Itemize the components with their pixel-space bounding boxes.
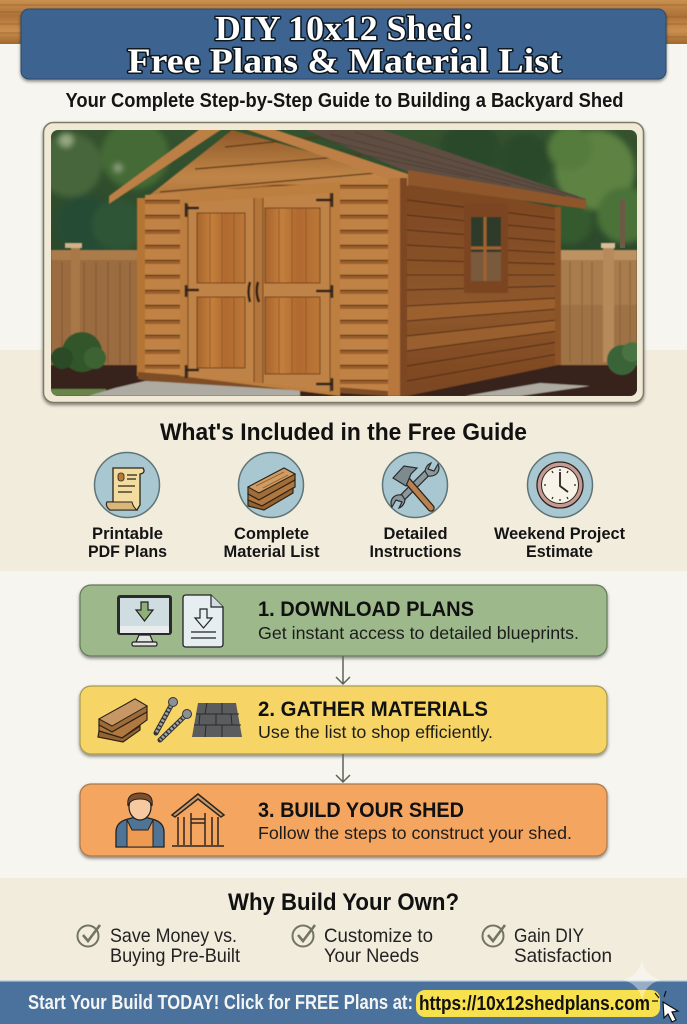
heading: what's included: What's Included in the Free Guide: [160, 419, 527, 446]
feature: weekend project estimate: Estimate: [526, 542, 593, 561]
label: Complete: [234, 524, 309, 543]
wood strip header background: [0, 0, 687, 44]
feature: complete material list: [224, 452, 320, 561]
side wall: [407, 177, 561, 396]
feature: printable pdf plans: PDF Plans: [88, 542, 167, 561]
step description: Use the list to shop efficiently.: [258, 722, 493, 742]
shed illustration: [38, 120, 653, 396]
icon: clock: [528, 452, 592, 518]
tree trunk: [620, 200, 625, 248]
icon: roof shingles: [192, 703, 242, 737]
cta text: Start Your Build TODAY! Click for FREE Plans at:: [28, 992, 413, 1014]
benefit: save money: Buying Pre-Built: [110, 945, 241, 967]
roof and fascia boards: [109, 129, 586, 396]
label: Printable: [92, 524, 163, 543]
step description: Follow the steps to construct your shed.: [258, 823, 572, 843]
ground: [51, 365, 637, 396]
icon: hammer and wrench: [382, 452, 448, 518]
benefit text: Customize to: [324, 925, 433, 947]
heading: why build your own: Why Build Your Own?: [228, 889, 459, 916]
benefit: diy satisfaction: [482, 925, 612, 967]
step 2: gather materials: [80, 686, 607, 754]
arrow: step 2 to 3: [336, 754, 350, 782]
icon: check: [292, 925, 315, 946]
step 3: build your shed: [80, 784, 607, 856]
step description: Get instant access to detailed blueprints.: [258, 623, 579, 643]
icon: worker: [116, 793, 164, 847]
step title: 3. BUILD YOUR SHED: [258, 798, 464, 822]
feature: printable pdf plans: [88, 452, 167, 561]
icon: cursor: [652, 991, 678, 1022]
benefit: save money: [78, 925, 241, 967]
icon: screws: [156, 698, 192, 740]
step 1: download plans: [80, 585, 607, 656]
benefit: customize: Your Needs: [324, 945, 419, 967]
step title: 2. GATHER MATERIALS: [258, 697, 488, 721]
benefit text: Gain DIY: [514, 925, 584, 947]
icon: lumber: [238, 452, 304, 518]
title text: DIY 10x12 Shed:: [215, 10, 474, 48]
icon: scroll: [94, 452, 160, 518]
front wall: [137, 130, 390, 396]
doors: [180, 182, 340, 396]
footer call to action: [0, 960, 687, 1024]
feature: weekend project estimate: [494, 452, 625, 561]
feature: detailed instructions: [370, 452, 462, 561]
feature: complete material list: Material List: [224, 542, 320, 561]
bushes: [51, 332, 642, 375]
step title: 1. DOWNLOAD PLANS: [258, 597, 474, 621]
fences: [51, 243, 637, 366]
trees: [51, 130, 637, 250]
icon: check: [78, 925, 100, 946]
benefit: diy satisfaction: Satisfaction: [514, 945, 612, 967]
feature: detailed instructions: Instructions: [370, 542, 462, 561]
icon: monitor: [117, 595, 172, 646]
window: [464, 203, 508, 293]
icon: shed frame: [172, 794, 224, 846]
label: Weekend Project: [494, 524, 625, 543]
benefit text: Save Money vs.: [110, 925, 237, 947]
icon: sparkle: [623, 960, 661, 1000]
label: Detailed: [384, 524, 448, 543]
arrow: step 1 to 2: [336, 656, 350, 684]
subtitle: Your Complete Step-by-Step Guide to Building a Backyard Shed: [66, 90, 624, 112]
title text: Free Plans & Material List: [128, 42, 562, 80]
benefit: customize: [292, 925, 433, 967]
hero photo frame: [38, 120, 653, 402]
icon: document download: [183, 595, 223, 647]
title text: [128, 10, 562, 80]
icon: check: [482, 925, 505, 946]
icon: lumber stack: [98, 699, 147, 742]
url pill: https://10x12shedplans.com: [419, 993, 650, 1015]
title banner: [21, 9, 666, 80]
